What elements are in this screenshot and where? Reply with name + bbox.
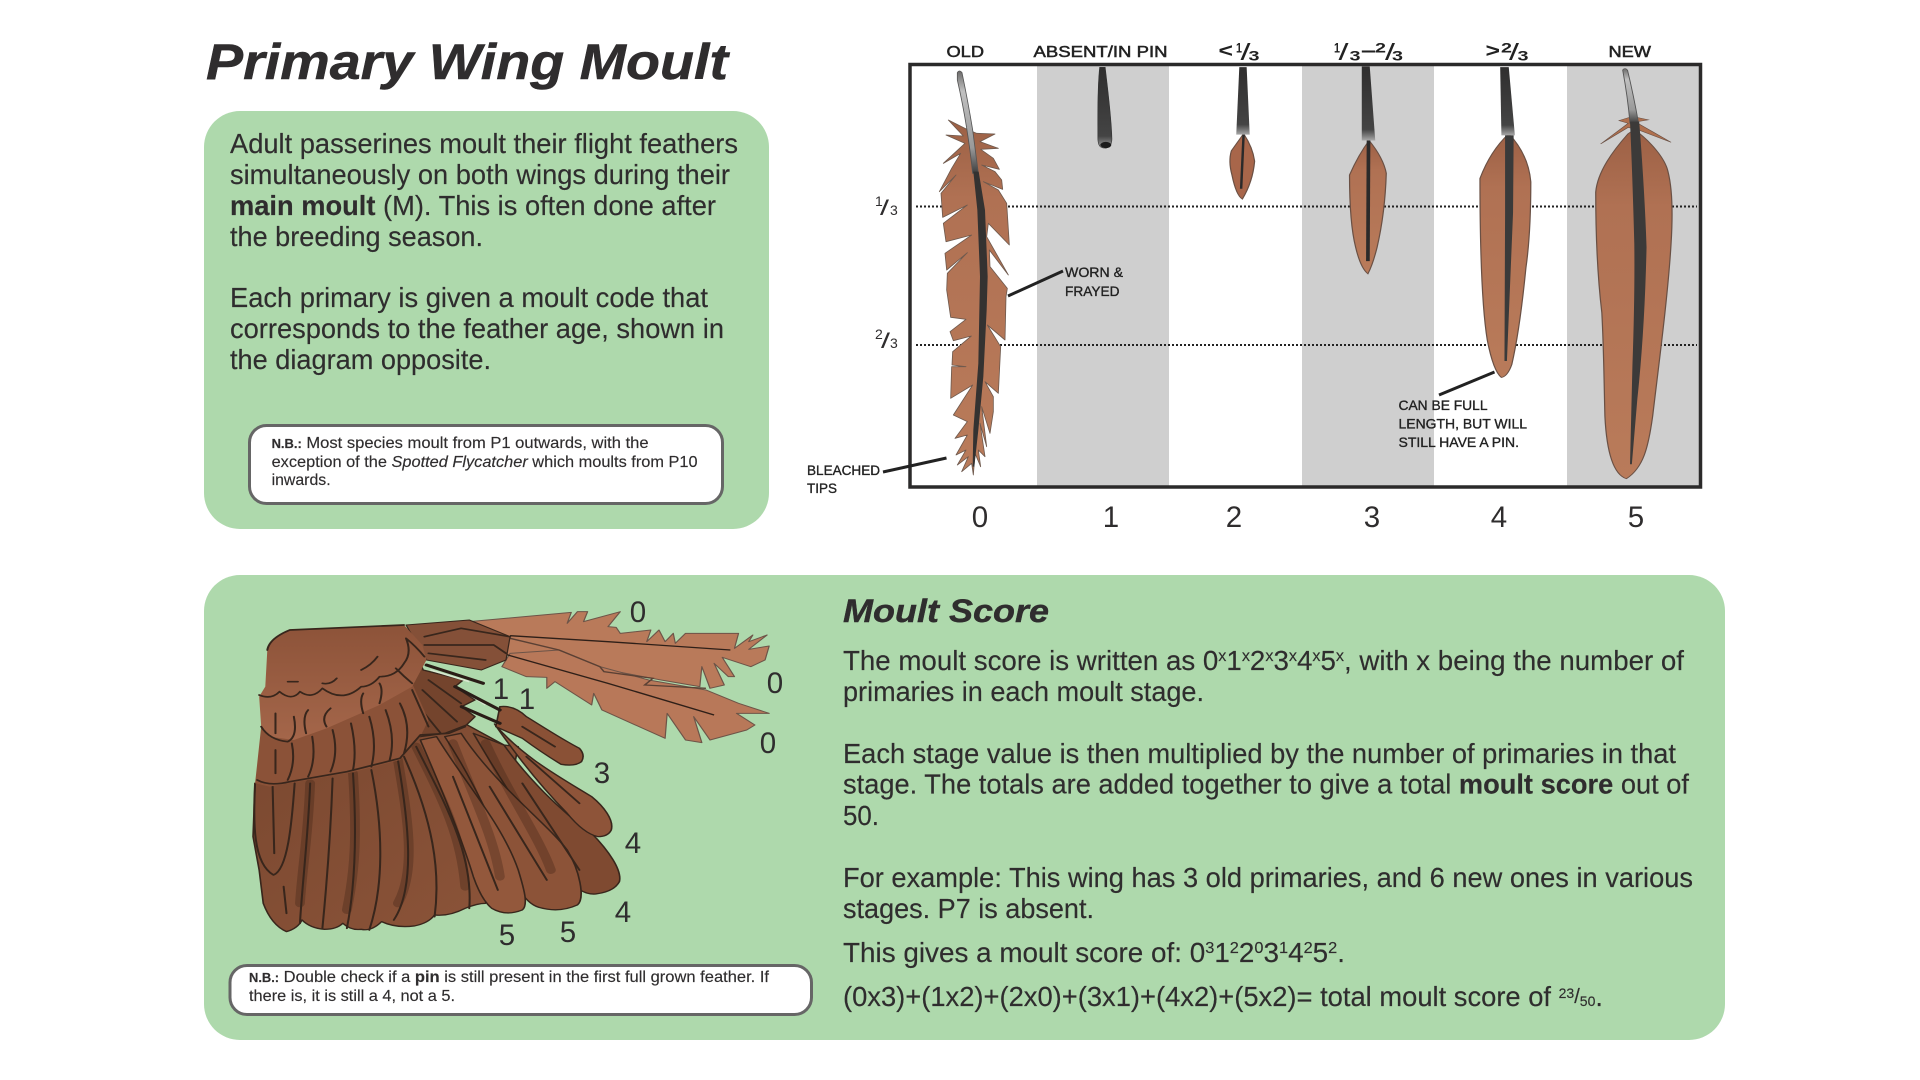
pins <box>426 665 500 723</box>
feather: stage 2 <box>1230 67 1255 199</box>
text block: score notation: x <box>1265 648 1273 665</box>
text block: score notation: x <box>1242 648 1250 665</box>
column heading: more than two thirds <box>1486 39 1529 65</box>
feather: stage 1 pin <box>1098 67 1112 148</box>
axis label: one third: / <box>880 197 889 220</box>
annotation: worn and frayed: FRAYED <box>1065 283 1120 299</box>
text block: main moult description: simultaneously on both wings during their <box>230 159 730 190</box>
text block: example score: 1 <box>1214 937 1230 968</box>
annotation: can be full length: CAN BE FULL <box>1398 397 1488 413</box>
column heading: more than two thirds: 2 <box>1501 40 1512 56</box>
old primaries <box>469 612 769 743</box>
column heading: less than one third: / <box>1240 39 1251 65</box>
text block: mould code description: Each primary is given a moult code that <box>230 282 708 313</box>
text block: mould code description: corresponds to the feather age, shown in <box>230 313 724 344</box>
callout: note on moult direction: N.B.: Most species moult from P1 outwards, with the <box>272 435 649 452</box>
text block: score notation: 1 <box>1226 645 1242 676</box>
alula <box>406 620 510 670</box>
text block: worked example <box>843 862 1693 924</box>
text block: main moult description: Adult passerines moult their flight feathers <box>230 128 738 159</box>
greater coverts <box>255 683 465 787</box>
callout: note on moult direction: inwards. <box>272 472 331 489</box>
text block: main moult description <box>230 128 738 252</box>
chart frame <box>910 64 1700 487</box>
text block: example score: 2 <box>1230 940 1239 957</box>
annotation: bleached tips: TIPS <box>807 480 837 496</box>
panel: introduction <box>204 111 769 529</box>
axis label: one third <box>875 193 898 220</box>
column heading: more than two thirds: 3 <box>1518 48 1529 64</box>
column heading: less than one third: < <box>1218 41 1233 62</box>
wing stage numbers: 1 <box>493 673 509 706</box>
annotation: can be full length: LENGTH, BUT WILL <box>1398 416 1527 432</box>
text block: score notation: 2 <box>1250 645 1265 676</box>
text block: score notation <box>843 645 1684 707</box>
axis label: two thirds <box>875 326 898 353</box>
text block: score notation: 3 <box>1273 645 1289 676</box>
feather: stage 0 old <box>939 71 1009 475</box>
text block: example score: This gives a moult score of: 0 <box>843 937 1198 968</box>
stage numbers: 5 <box>1628 501 1644 534</box>
text block: example score: 2 <box>1304 940 1313 957</box>
stage numbers: 1 <box>1103 501 1119 534</box>
callout: note on moult direction: exception of the Spotted Flycatcher which moults from P10 <box>272 454 698 471</box>
axis label: one third: 1 <box>875 193 883 209</box>
column heading: one third to two thirds: – <box>1361 40 1376 62</box>
text block: example score: 0 <box>1254 940 1264 957</box>
callout: pin check note: there is, it is still a 4, not a 5. <box>249 988 455 1005</box>
text block: mould code description <box>230 282 724 375</box>
column heading: absent or in pin: ABSENT/IN PIN <box>1034 44 1168 61</box>
axis label: one third: 3 <box>890 202 898 218</box>
text block: worked example: stages. P7 is absent. <box>843 893 1094 924</box>
stage numbers <box>972 501 1644 534</box>
annotation: bleached tips: BLEACHED <box>807 462 880 478</box>
text block: example score: 3 <box>1263 937 1279 968</box>
annotation: worn and frayed: WORN & <box>1065 264 1124 280</box>
wing stage numbers: 3 <box>594 757 610 790</box>
text block: example score: 1 <box>1279 940 1288 957</box>
stage numbers: 3 <box>1364 501 1380 534</box>
text block: score notation: x <box>1218 648 1226 665</box>
column heading: one third to two thirds: 2 <box>1375 40 1386 56</box>
text block: example total: / <box>1574 986 1580 1008</box>
text block: main moult description: the breeding season. <box>230 221 483 252</box>
column heading: more than two thirds: > <box>1486 41 1500 62</box>
text block: score notation: x <box>1289 648 1297 665</box>
stage numbers: 4 <box>1491 501 1507 534</box>
axis label: two thirds: / <box>881 330 890 353</box>
text block: mould code description: the diagram opposite. <box>230 344 491 375</box>
text block: example score: 2 <box>1239 937 1254 968</box>
text block: example score: 4 <box>1288 937 1304 968</box>
text block: example total: (0x3)+(1x2)+(2x0)+(3x1)+(4x2)+(5x2)= total moult score of <box>843 981 1550 1012</box>
wing stage numbers: 0 <box>767 667 783 700</box>
text block: score notation: 4 <box>1297 645 1312 676</box>
column heading: old: OLD <box>946 44 984 61</box>
annotation: worn and frayed <box>1008 264 1124 299</box>
column band: stage 3 <box>1302 64 1434 487</box>
column band: stage 5 <box>1567 64 1699 487</box>
column band: stage 1 <box>1037 64 1169 487</box>
text block: example score: . <box>1337 937 1345 968</box>
column heading: new: NEW <box>1608 44 1651 61</box>
text block: example score: 2 <box>1328 940 1337 957</box>
column heading: one third to two thirds: 1 <box>1334 40 1340 56</box>
title: Primary Wing Moult <box>206 34 731 90</box>
axis label: two thirds: 3 <box>890 335 898 351</box>
text block: worked example: For example: This wing has 3 old primaries, and 6 new ones in various <box>843 862 1693 893</box>
fan of primaries and secondaries <box>253 706 620 932</box>
text block: score notation: , with x being the number of <box>1344 645 1684 676</box>
column heading: less than one third <box>1218 39 1260 65</box>
stage numbers: 0 <box>972 501 988 534</box>
feather: stage 3 <box>1350 66 1386 274</box>
column heading: less than one third: 3 <box>1248 48 1260 64</box>
wing stage numbers <box>493 596 783 952</box>
lesser coverts <box>259 625 426 742</box>
wing stage numbers: 5 <box>560 916 576 949</box>
wing stage numbers: 0 <box>630 596 646 629</box>
text block: score notation: x <box>1336 648 1344 665</box>
annotation: can be full length: STILL HAVE A PIN. <box>1398 434 1519 450</box>
text block: example score: 3 <box>1205 940 1214 957</box>
chart: feather growth stages <box>807 39 1700 534</box>
text block: score notation: 5 <box>1320 645 1336 676</box>
annotation: bleached tips <box>807 458 946 496</box>
text block: calculation method: stage. The totals are added together to give a total moult score out of <box>843 768 1689 800</box>
callout: pin check note: N.B.: Double check if a pin is still present in the first full grown feather. If <box>249 969 770 986</box>
text block: example score: 5 <box>1313 937 1328 968</box>
axis label: two thirds: 2 <box>875 326 883 342</box>
text block: example total: 50 <box>1580 993 1596 1009</box>
wing stage numbers: 0 <box>760 727 776 760</box>
column heading: one third to two thirds: 3 <box>1350 48 1361 64</box>
text block: example total: . <box>1595 981 1603 1012</box>
column heading: one third to two thirds <box>1334 39 1403 65</box>
text block: score notation: x <box>1312 648 1320 665</box>
column heading: one third to two thirds: 3 <box>1392 48 1403 64</box>
column heading: one third to two thirds: / <box>1338 39 1349 65</box>
stage numbers: 2 <box>1226 501 1242 534</box>
wing stage numbers: 4 <box>625 827 641 860</box>
text block: main moult description: main moult (M). This is often done after <box>230 190 716 221</box>
column heading: one third to two thirds: / <box>1385 39 1396 65</box>
column heading: more than two thirds: / <box>1509 39 1520 65</box>
callout: note on moult direction <box>250 426 722 504</box>
text block: calculation method: 50. <box>843 800 879 831</box>
text block: score notation: The moult score is written as 0 <box>843 645 1213 676</box>
panel: moult score <box>204 575 1725 1040</box>
text block: score notation: primaries in each moult stage. <box>843 676 1204 707</box>
illustration: wing <box>253 612 769 932</box>
wing stage numbers: 4 <box>615 896 631 929</box>
text block: example total: 23 <box>1559 985 1574 1001</box>
column heading: less than one third: 1 <box>1236 40 1242 56</box>
text block: calculation method <box>843 738 1689 831</box>
heading: moult score: Moult Score <box>843 593 1049 629</box>
wing stage numbers: 5 <box>499 919 515 952</box>
primary coverts <box>404 663 475 737</box>
feather: stage 5 new <box>1596 68 1672 479</box>
feather: stage 4 <box>1480 67 1531 377</box>
annotation: can be full length <box>1398 372 1527 450</box>
wing stage numbers: 1 <box>519 683 535 716</box>
text block: calculation method: Each stage value is then multiplied by the number of primaries in that <box>843 738 1676 769</box>
callout: pin check note <box>230 966 812 1014</box>
